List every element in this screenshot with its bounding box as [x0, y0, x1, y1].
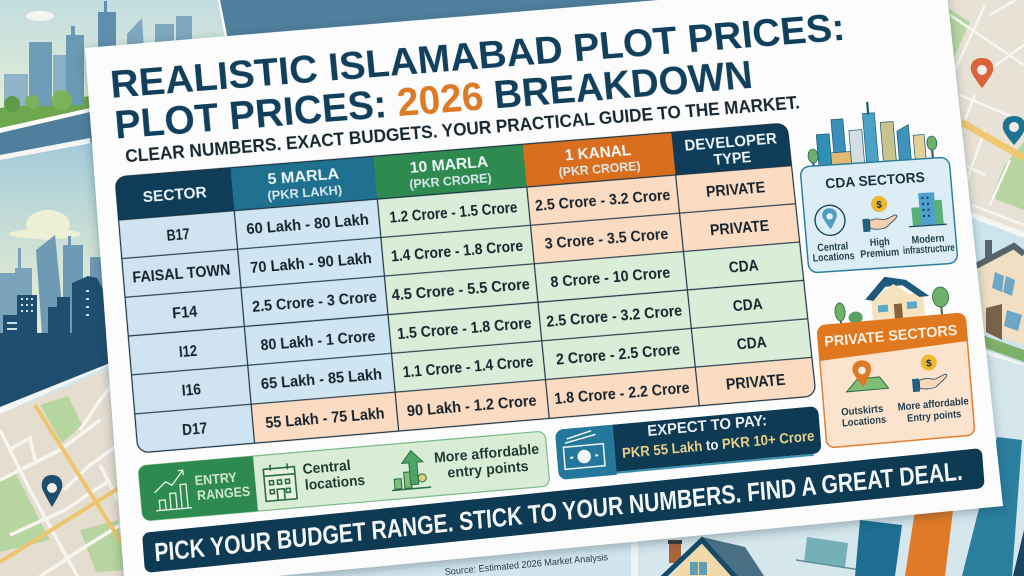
table row: B17: 1.2 Crore - 1.5 Crore	[389, 200, 520, 227]
panel: CDA sectors	[795, 97, 958, 273]
icon: banknotes	[562, 430, 605, 469]
sheet: left street map	[0, 368, 135, 576]
private labels: More affordable	[897, 395, 969, 414]
table row: I16: 1.1 Crore - 1.4 Crore	[401, 353, 533, 380]
icon: central building calendar	[263, 463, 297, 501]
table row: I16: 65 Lakh - 85 Lakh	[259, 365, 381, 391]
table row: I12: 2.5 Crore - 3.2 Crore	[545, 303, 684, 330]
icon: premium hand and coin	[861, 195, 898, 232]
table header row: SECTOR	[142, 184, 207, 206]
table row: F14	[172, 257, 759, 322]
strip: entry ranges	[138, 431, 550, 521]
more affordable label: More affordable	[433, 442, 540, 467]
table row: B17: PRIVATE	[710, 181, 771, 202]
sheet: right house	[965, 210, 1024, 366]
house and trees above private panel	[832, 271, 950, 326]
background band: slate blue	[0, 0, 680, 170]
table row: Faisal Town	[132, 218, 770, 287]
bar: blue	[855, 520, 902, 576]
panel: private sectors	[813, 270, 975, 448]
sheet: top-left city	[0, 0, 228, 133]
more affordable label: entry points	[447, 459, 529, 482]
CDA panel heading: CDA SECTORS	[825, 169, 925, 191]
bar: orange	[905, 510, 953, 576]
table header row: 1 KANAL	[567, 143, 636, 165]
table row: I12: I12	[177, 341, 197, 359]
table header row: 5 MARLA	[267, 166, 341, 189]
central locations label: Central	[302, 458, 351, 478]
table row: Faisal Town: FAISAL TOWN	[131, 261, 231, 286]
table header row: 10 MARLA	[411, 155, 491, 177]
private panel heading: PRIVATE SECTORS	[824, 323, 958, 350]
more affordable label	[433, 442, 541, 483]
CDA labels: Modern	[911, 233, 945, 246]
table row: B17: 60 Lakh - 80 Lakh	[246, 212, 370, 238]
table row: D17: 1.8 Crore - 2.2 Crore	[552, 379, 689, 407]
icon: affordable hand and coin: $	[926, 358, 933, 370]
table row: Faisal Town: 1.4 Crore - 1.8 Crore	[391, 238, 525, 265]
icon: teal map pin	[1003, 116, 1024, 145]
entry ranges label: RANGES	[196, 484, 251, 503]
private labels: Entry points	[907, 408, 962, 425]
bottom house	[660, 537, 768, 576]
subtitle: CLEAR NUMBERS. EXACT BUDGETS. YOUR PRACTICAL GUIDE TO THE MARKET.	[125, 93, 808, 166]
CDA labels: Locations	[812, 251, 855, 265]
table row: B17	[166, 179, 766, 245]
table row: I16: I16	[180, 379, 200, 397]
icon: rising chart	[153, 470, 192, 511]
title: PLOT PRICES: 2026 BREAKDOWN	[113, 52, 762, 148]
table row: I12: CDA	[734, 297, 765, 316]
icon: premium hand and coin: $	[876, 200, 883, 211]
table row: D17: 90 Lakh - 1.2 Crore	[404, 391, 535, 418]
table row: F14: F14	[171, 302, 198, 321]
table row: I12: 80 Lakh - 1 Crore	[259, 327, 375, 353]
table row: D17	[181, 372, 786, 439]
expect to pay text: EXPECT TO PAY:	[647, 412, 768, 440]
skyline above CDA panel	[804, 98, 938, 169]
table row: Faisal Town: 3 Crore - 3.5 Crore	[545, 227, 672, 253]
table row: B17: 2.5 Crore - 3.2 Crore	[536, 188, 674, 215]
central locations label	[302, 457, 366, 494]
private panel box	[817, 313, 975, 448]
table row: D17: 55 Lakh - 75 Lakh	[263, 403, 383, 429]
CDA labels: Premium	[860, 247, 900, 261]
bar: large blue	[962, 437, 1022, 576]
icon: growth arrow chart	[389, 449, 431, 490]
table row: I16: CDA	[737, 335, 768, 354]
table cell backgrounds	[115, 123, 816, 454]
CDA labels	[811, 232, 955, 265]
table row: F14: 2.5 Crore - 3 Crore	[251, 288, 377, 315]
sheet: bottom bar chart and house	[631, 360, 1024, 576]
icon: outskirts map pin	[844, 358, 889, 392]
icon: affordable hand and coin	[910, 353, 948, 392]
CDA labels: infrastructure	[903, 243, 955, 257]
table row: D17: D17	[180, 417, 206, 436]
private labels: Locations	[842, 414, 887, 429]
callout: expect to pay: PKR 55 Lakh to PKR 10+ Crore	[622, 429, 815, 462]
callout: expect to pay	[555, 406, 822, 480]
table row: I12	[178, 296, 763, 361]
table row: I16	[181, 334, 767, 400]
icon: navy map pin	[42, 475, 62, 507]
table row: I12: 1.5 Crore - 1.8 Crore	[396, 315, 532, 342]
central locations label: locations	[304, 473, 366, 494]
entry ranges label: ENTRY	[194, 470, 237, 488]
table header row: DEVELOPER	[689, 132, 784, 156]
table header row: (PKR CRORE)	[410, 172, 494, 192]
icon: modern buildings	[906, 192, 947, 227]
table row: D17: PRIVATE	[725, 372, 786, 393]
CDA labels: Central	[817, 241, 849, 254]
table header row: (PKR LAKH)	[267, 184, 343, 203]
private labels	[841, 395, 970, 430]
table row: Faisal Town: PRIVATE	[713, 219, 774, 240]
table row: F14: 4.5 Crore - 5.5 Crore	[391, 276, 531, 304]
table row: F14: CDA	[731, 258, 762, 277]
table header row: TYPE	[718, 150, 757, 170]
private panel header	[817, 313, 968, 361]
icon: orange map pin	[971, 58, 993, 88]
CDA labels: High	[869, 237, 890, 249]
table row: Faisal Town: 70 Lakh - 90 Lakh	[249, 250, 372, 276]
bar: teal short	[804, 537, 848, 567]
icon: central location	[814, 204, 846, 236]
table header row	[141, 131, 779, 215]
private labels: Outskirts	[841, 403, 884, 418]
sheet: top-right street map	[940, 0, 1024, 233]
table row: I16: 2 Crore - 2.5 Crore	[555, 341, 681, 368]
table header row: (PKR CRORE)	[561, 160, 645, 180]
table row: B17: B17	[166, 226, 190, 244]
table row: F14: 8 Crore - 10 Crore	[550, 265, 673, 292]
CDA panel box	[800, 157, 958, 273]
entry ranges label	[194, 469, 251, 503]
title block and price table	[109, 6, 857, 453]
price table	[115, 123, 816, 454]
title: REALISTIC ISLAMABAD PLOT PRICES:	[109, 6, 857, 107]
sheet: left city skyline	[0, 138, 116, 414]
